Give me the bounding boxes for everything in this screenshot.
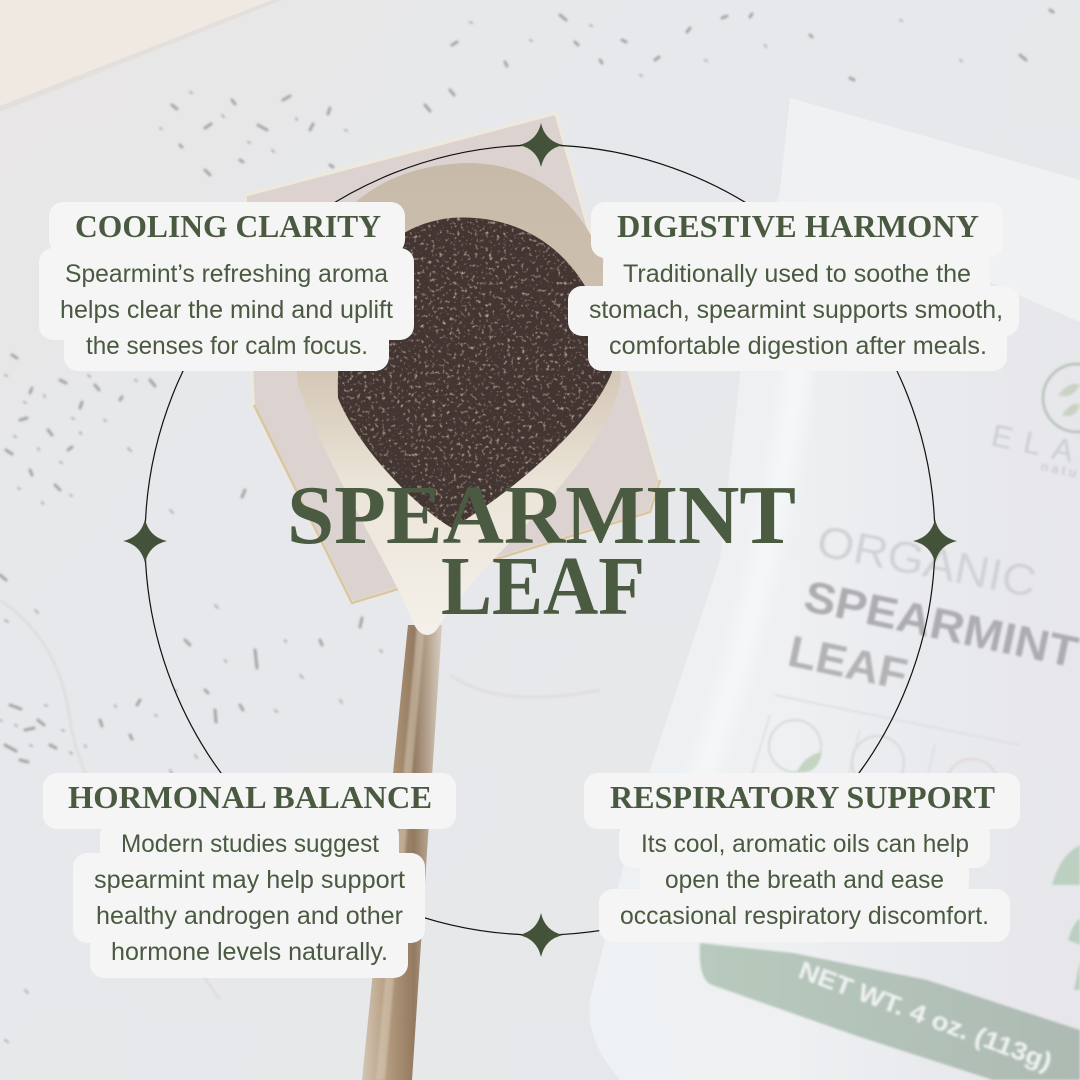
panel: cooling clarity	[39, 202, 414, 371]
loose tea leaves	[338, 218, 612, 528]
text: respiratory support body: Its cool, aromatic oils can help	[641, 830, 969, 858]
panel: hormonal balance	[43, 773, 456, 978]
bag logo: natu	[1039, 458, 1080, 481]
product bag	[589, 98, 1080, 1080]
panel: digestive harmony	[568, 202, 1019, 371]
bag label text: LEAF	[784, 627, 911, 700]
text: hormonal balance body: healthy androgen and other	[96, 902, 403, 930]
heading: respiratory support: RESPIRATORY SUPPORT	[610, 779, 995, 815]
text: hormonal balance body: Modern studies suggest	[121, 830, 379, 858]
text: digestive harmony body	[589, 260, 1003, 360]
bag label text: SPEARMINT	[800, 572, 1080, 678]
text: respiratory support body: open the breath and ease	[665, 866, 944, 894]
bag label text: ORGANIC	[813, 517, 1040, 607]
text: cooling clarity body	[60, 260, 393, 360]
text: hormonal balance body: spearmint may help support	[94, 866, 405, 894]
bag weight band: NET WT. 4 oz. (113g)	[795, 956, 1056, 1076]
spoon bowl	[296, 163, 621, 635]
text: respiratory support body	[620, 830, 989, 930]
sparkle: bottom	[519, 913, 563, 957]
heading: hormonal balance: HORMONAL BALANCE	[68, 779, 432, 815]
bag logo	[989, 364, 1080, 481]
spoon handle	[362, 625, 442, 1080]
title	[287, 469, 796, 633]
text: cooling clarity body: the senses for calm focus.	[86, 332, 368, 360]
text: cooling clarity body: helps clear the mind and uplift	[60, 296, 393, 324]
ring connecting the four benefits	[145, 145, 935, 935]
bag leaves	[1052, 845, 1080, 990]
text: digestive harmony body: stomach, spearmint supports smooth,	[589, 296, 1003, 324]
text: respiratory support body: occasional respiratory discomfort.	[620, 902, 989, 930]
heading: digestive harmony: DIGESTIVE HARMONY	[617, 208, 979, 244]
stone coaster	[245, 113, 660, 603]
sparkle: left	[123, 519, 167, 563]
text: digestive harmony body: Traditionally used to soothe the	[623, 260, 971, 288]
bag weight band	[700, 943, 1080, 1080]
sparkle: right	[913, 519, 957, 563]
panel: respiratory support	[584, 773, 1020, 942]
text: digestive harmony body: comfortable digestion after meals.	[609, 332, 987, 360]
text: cooling clarity body: Spearmint’s refreshing aroma	[65, 260, 388, 288]
bag label text	[735, 517, 1080, 830]
sparkle: top	[519, 123, 563, 167]
text: hormonal balance body	[94, 830, 405, 966]
heading: cooling clarity: COOLING CLARITY	[75, 208, 381, 244]
title: LEAF	[441, 540, 645, 633]
text: hormonal balance body: hormone levels naturally.	[111, 938, 388, 966]
title: SPEARMINT	[287, 469, 796, 562]
